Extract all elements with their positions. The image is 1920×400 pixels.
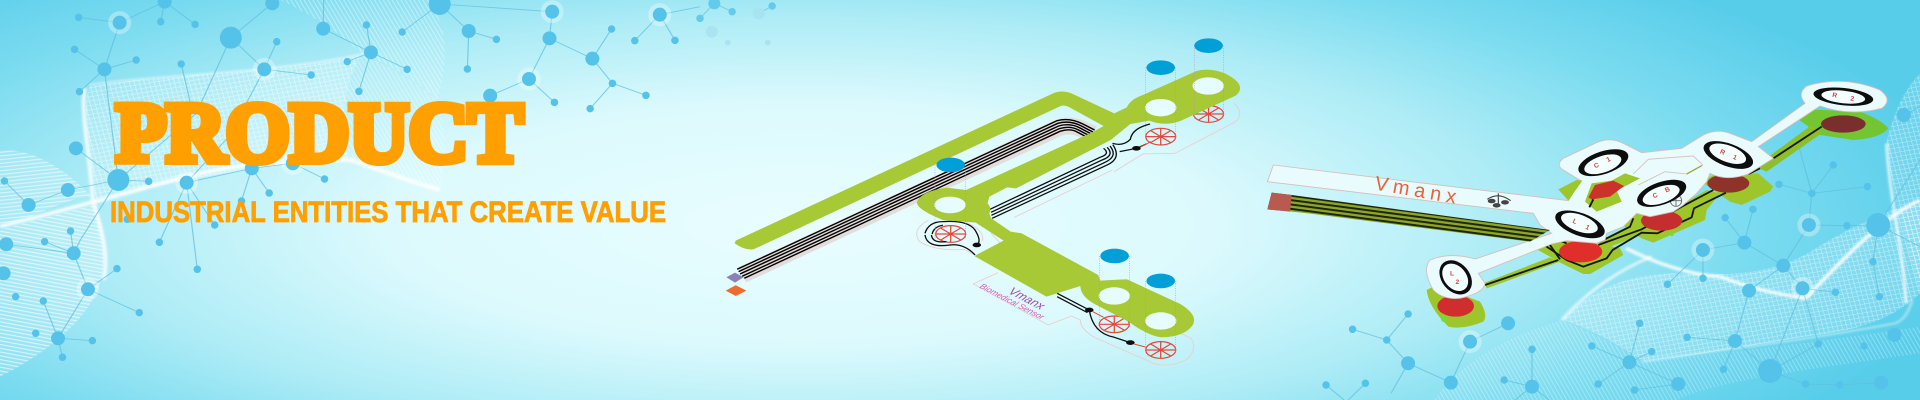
cover cut-out outline: [1633, 156, 1703, 185]
green base pads: [1427, 109, 1888, 328]
electrode labels: 2: [1850, 95, 1855, 103]
contact diamonds: [726, 273, 746, 296]
second conductor traces: [925, 124, 1150, 343]
green conductive layer: [735, 70, 1240, 337]
black ring electrodes: [1433, 85, 1874, 301]
electrode labels: R: [1832, 92, 1838, 100]
electrode labels: 1: [1584, 224, 1591, 232]
left molecular network: [4, 0, 700, 357]
black connectors and red leads: [972, 142, 1151, 347]
left wave mesh: [0, 0, 445, 377]
electrode labels: L: [1450, 271, 1454, 278]
sensor label: Vmanx: [1005, 286, 1049, 312]
electrode labels: C: [1652, 192, 1659, 200]
logo icon: [1487, 193, 1511, 207]
electrode labels: C: [1593, 162, 1601, 170]
electrode labels: L: [1571, 218, 1578, 226]
top-centre faded nodes: [700, 3, 772, 43]
dotted alignment lines: [935, 46, 1224, 353]
electrode labels: R: [1719, 148, 1726, 157]
right wave mesh: [1434, 73, 1920, 400]
CB logo mark: [1670, 195, 1682, 206]
long black conductor traces: [737, 120, 1095, 278]
ribbon strip: [1267, 193, 1550, 242]
Vmanx logo text: Vmanx: [1373, 173, 1463, 209]
electrode labels: B: [1664, 186, 1672, 194]
electrode labels: 1: [1606, 156, 1612, 164]
hole ellipses: [934, 77, 1224, 330]
white cover layer: [1267, 81, 1887, 299]
title: PRODUCT: [116, 86, 523, 180]
right sensor diagram: [1267, 81, 1888, 328]
right molecular network: [1326, 107, 1920, 400]
olive sliver: [1687, 166, 1702, 174]
subtitle: INDUSTRIAL ENTITIES THAT CREATE VALUE: [110, 196, 666, 229]
black traces: [1485, 127, 1822, 285]
central sensor diagram: [726, 38, 1240, 365]
electrode wheels: [936, 106, 1224, 358]
C1 green pad: [1558, 173, 1640, 212]
sensor label: Biomedical Sensor: [977, 282, 1047, 321]
sensor outline: [917, 103, 1240, 365]
electrode labels: 2: [1455, 279, 1459, 286]
electrode labels: 1: [1731, 154, 1738, 162]
electrode labels: [1450, 92, 1855, 286]
connector patch: [1267, 193, 1292, 212]
red electrode pads: [1437, 115, 1866, 322]
blue discs: [936, 38, 1223, 288]
ribbon cable and tail: [1267, 173, 1550, 242]
